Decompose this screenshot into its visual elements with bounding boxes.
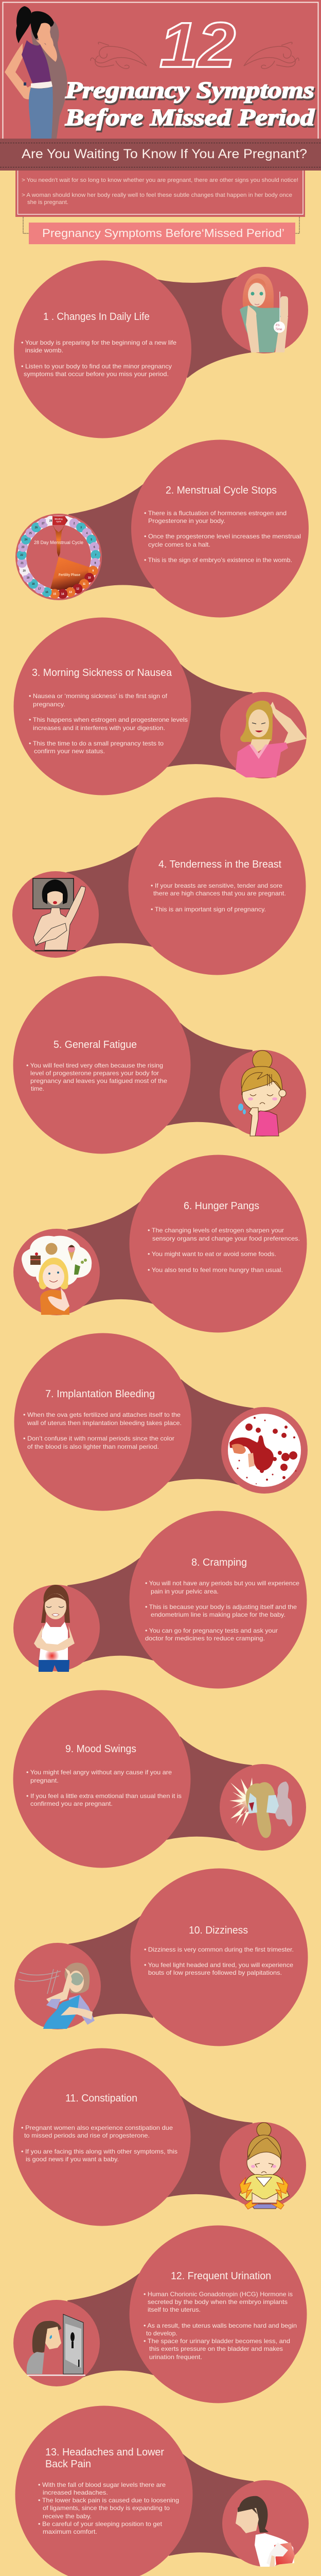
body text	[145, 1580, 299, 1642]
body text: Progesterone in your body.	[148, 518, 225, 524]
body text: • You will not have any periods but you will experience	[145, 1580, 299, 1587]
small circle	[220, 1050, 306, 1137]
chart: 28 day cycle wheel: Bleeding	[55, 518, 63, 520]
ornament right	[244, 42, 299, 69]
section 9: mood swings	[13, 1690, 306, 1868]
body text: inside womb.	[25, 347, 63, 354]
body text: • This the time to do a small pregnancy tests to	[29, 740, 164, 747]
body text: endometrium line is making place for the baby.	[151, 1612, 286, 1618]
body text: • You can go for pregnancy tests and ask your	[145, 1628, 278, 1634]
small circle	[15, 514, 102, 600]
chart: 28 day cycle wheel: 5	[91, 538, 92, 541]
body text: cycle comes to a halt.	[148, 541, 210, 548]
body text: symptoms that occur before you miss your period.	[24, 371, 169, 378]
body text: • This happens when estrogen and progesterone levels	[29, 717, 188, 723]
body text: • You might feel angry without any cause if you are	[26, 1769, 172, 1776]
body text: is good news if you want a baby.	[26, 2156, 119, 2163]
small circle	[220, 1764, 306, 1851]
main circle	[130, 1155, 307, 1332]
question banner: Are You Waiting To Know If You Are Pregnant?	[22, 147, 307, 161]
body text: pain in your pelvic area.	[151, 1588, 219, 1595]
main circle	[13, 976, 190, 1154]
body text: • This is the sign of embryo’s existence in the womb.	[144, 557, 292, 564]
body text: there are high chances that you are pregnant.	[153, 890, 286, 897]
body text: doctor for medicines to reduce cramping.	[145, 1635, 265, 1642]
cheeks	[251, 2165, 276, 2168]
section 6: hunger pangs	[13, 1155, 307, 1332]
icon: woman examining breast	[33, 878, 85, 951]
body text: • You might want to eat or avoid some foods.	[148, 1251, 276, 1258]
body text: • If you are facing this along with other symptoms, this	[21, 2148, 177, 2155]
connector	[168, 1379, 254, 1485]
question banner	[0, 139, 321, 171]
body text: pregnancy.	[33, 701, 65, 708]
body text	[38, 2482, 179, 2535]
body text: • As a result, the uterus walls become hard and begin	[144, 2323, 297, 2329]
connector	[156, 277, 252, 378]
body text: bouts of low pressure followed by palpitations.	[148, 1970, 282, 1976]
chart: 28 day cycle wheel: 10	[88, 577, 91, 580]
heading: 5. General Fatigue	[53, 1039, 137, 1050]
body text: • The lower back pain is caused due to loosening	[38, 2497, 179, 2504]
main circle	[130, 2226, 307, 2403]
body text: confirm your new status.	[34, 748, 105, 755]
chart: 28 day cycle wheel: 13	[69, 591, 72, 594]
main circle	[15, 2406, 192, 2576]
body text	[23, 1412, 182, 1450]
small circle	[14, 1943, 101, 2029]
chart: 28 day cycle wheel: 18	[32, 583, 34, 586]
chart: 28 day cycle wheel: 16	[45, 591, 48, 594]
body text: • If you feel a little extra emotional than usual then it is	[26, 1793, 182, 1800]
section 11: constipation	[13, 2048, 306, 2226]
icon: red-haired woman with pendulum: It's	[276, 324, 279, 327]
chart: 28 day cycle wheel: 28 Day Menstrual Cycle	[34, 540, 83, 546]
main circle	[130, 1511, 307, 1689]
ornament left	[91, 42, 147, 69]
chart: 28 day cycle wheel: 17	[38, 587, 41, 590]
connector	[67, 1556, 153, 1663]
body text	[151, 883, 286, 913]
section 12: frequent urination	[13, 2226, 307, 2403]
fertility wedge	[50, 557, 91, 590]
main circle	[14, 261, 191, 438]
body text	[29, 693, 188, 755]
connector	[67, 2272, 153, 2378]
main circle	[129, 798, 306, 975]
body text	[144, 510, 301, 564]
chart: 28 day cycle wheel: 11	[83, 583, 85, 586]
small circle	[221, 1407, 308, 1494]
body text: • Don’t confuse it with normal periods since the color	[23, 1435, 174, 1442]
body text: • Your body is preparing for the beginning of a new life	[21, 340, 176, 346]
body text: of the blood is also lighter than normal period.	[27, 1444, 159, 1450]
small circle	[13, 2300, 100, 2386]
body text: • Nausea or ‘morning sickness’ is the first sign of	[29, 693, 168, 700]
intro text	[22, 177, 298, 206]
body text	[148, 1227, 300, 1274]
body text	[26, 1062, 167, 1092]
chart: 28 day cycle wheel: 1	[66, 519, 67, 522]
chart: 28 day cycle wheel: 26	[35, 527, 38, 530]
body text: • You feel light headed and tired, you will experience	[144, 1962, 293, 1969]
section 13: headaches and lower back pain	[15, 2406, 309, 2576]
icon: tired girl	[241, 1050, 286, 1136]
body text: • Pregnant women also experience constipation due	[21, 2125, 173, 2131]
small circle	[222, 2480, 309, 2567]
body text: • You will feel tired very often because the rising	[26, 1062, 163, 1069]
body text: • Listen to your body to find out the minor pregnancy	[21, 363, 172, 370]
body text: secreted by the body when the embryo implants	[148, 2299, 288, 2306]
main circle	[131, 1868, 308, 2046]
title number 12: 12	[159, 10, 236, 81]
chart: 28 day cycle wheel: 28	[49, 519, 52, 522]
icon: girl holding stomach	[239, 2123, 289, 2209]
chart: 28 day cycle wheel: 23	[22, 546, 25, 549]
icon: woman at restroom door	[27, 2314, 85, 2376]
main circle	[14, 1333, 191, 1511]
sub-heading bracket	[23, 217, 299, 233]
body text: itself to the uterus.	[148, 2307, 201, 2313]
sub-heading box	[29, 223, 295, 244]
chart: 28 day cycle wheel: 20	[23, 570, 26, 573]
heading: 2. Menstrual Cycle Stops	[166, 485, 277, 496]
chart: 28 day cycle wheel: 12	[76, 587, 79, 590]
title text: Pregnancy Symptoms	[65, 77, 314, 103]
connector	[67, 1200, 153, 1307]
heading: 7. Implantation Bleeding	[45, 1388, 155, 1400]
connector	[167, 1736, 252, 1843]
section 4: tenderness in the breast	[12, 798, 306, 975]
icon: woman with headache	[236, 701, 307, 777]
body text: • With the fall of blood sugar levels there are	[38, 2482, 166, 2488]
chart: 28 day cycle wheel: 8	[95, 562, 96, 565]
heading: 10. Dizziness	[189, 1925, 248, 1936]
heading: 3. Morning Sickness or Nausea	[32, 667, 172, 679]
intro panel	[15, 170, 305, 217]
small circle	[222, 267, 308, 353]
chart: 28 day cycle wheel: 25	[29, 532, 32, 535]
small circle	[13, 1585, 100, 1671]
icon: pain bolts	[240, 2177, 288, 2209]
chart: 28 day cycle wheel: 7	[95, 554, 97, 557]
icon: dizzy woman	[19, 1963, 95, 2029]
main circle	[13, 2048, 190, 2226]
intro text: she is pregnant.	[27, 199, 68, 206]
heading: 4. Tenderness in the Breast	[158, 859, 281, 870]
heading: 12. Frequent Urination	[171, 2270, 271, 2282]
title text: Before Missed Period	[65, 104, 315, 130]
icon: red-haired woman with pendulum	[240, 274, 288, 352]
body text: • When the ova gets fertilized and attaches itself to the	[23, 1412, 181, 1418]
section 8: cramping	[13, 1511, 307, 1689]
body text: increases and it interferes with your digestion.	[33, 725, 165, 732]
body text: • This is an important sign of pregnancy.	[151, 906, 266, 913]
body text: receive the baby.	[43, 2513, 92, 2520]
chart: 28 day cycle wheel: 14	[61, 592, 64, 596]
small circle	[220, 2122, 306, 2209]
section 5: general fatigue	[13, 976, 306, 1154]
heading: 13. Headaches and Lower	[45, 2447, 164, 2458]
icon: two-faced mood illustration	[229, 1777, 292, 1838]
heading: 11. Constipation	[65, 2093, 137, 2104]
body text	[21, 340, 176, 378]
section 7: implantation bleeding	[14, 1333, 308, 1511]
body text: • Once the progesterone level increases the menstrual	[144, 533, 301, 540]
chart: 28 day cycle wheel: 15	[53, 592, 56, 596]
header panel	[0, 0, 321, 151]
main circle	[13, 1690, 190, 1868]
chart: 28 day cycle wheel: 9	[93, 570, 94, 573]
chart: 28 day cycle wheel: 22	[20, 554, 23, 557]
chart: 28 day cycle wheel: Fertility Phase	[59, 572, 80, 577]
title line shadow: Before Missed Period	[66, 106, 316, 132]
body text	[144, 2291, 297, 2361]
body text	[21, 2125, 177, 2163]
body text: maximum comfort.	[43, 2529, 97, 2535]
body text: • If your breasts are sensitive, tender and sore	[151, 883, 282, 889]
heading: 6. Hunger Pangs	[184, 1200, 259, 1212]
small circle	[220, 692, 307, 778]
chart: 28 day cycle wheel	[17, 516, 100, 599]
body text	[26, 1769, 182, 1807]
chart: 28 day cycle wheel: 2	[74, 522, 75, 526]
body text: of ligaments, since the body is expanding to	[43, 2505, 170, 2512]
body text: confirmed you are pregnant.	[30, 1801, 113, 1807]
chart: 28 day cycle wheel: Cycle	[56, 520, 61, 522]
sub-heading box: Pregnancy Symptoms Before‘Missed Period’	[42, 227, 284, 240]
body text: time.	[31, 1086, 44, 1092]
body text: urination frequent.	[149, 2354, 202, 2361]
chart: 28 day cycle wheel: 24	[25, 538, 27, 541]
body text: pregnant.	[30, 1777, 59, 1784]
body text: • Dizziness is very common during the first trimester.	[144, 1946, 294, 1953]
body text: level of progesterone prepares your body for	[30, 1070, 159, 1077]
title line shadow: Pregnancy Symptoms	[66, 78, 315, 105]
small circle	[13, 1229, 100, 1315]
intro text: > A woman should know her body really well to feel these subtle changes that happen in her body once	[22, 192, 292, 198]
chart: 28 day cycle wheel: 19	[27, 577, 29, 580]
icon: woman with back pain	[236, 2496, 295, 2567]
heading: 8. Cramping	[191, 1557, 247, 1568]
title text	[65, 77, 315, 130]
chart: 28 day cycle wheel: 21	[21, 562, 24, 565]
intro text: > You needn't wait for so long to know whether you are pregnant, there are other signs you should notice!	[22, 177, 298, 183]
icon: tear drops	[238, 1097, 277, 1114]
body text	[144, 1946, 294, 1976]
section 10: dizziness	[14, 1868, 308, 2046]
title line shadow	[66, 78, 316, 132]
section 1: changes in daily life	[14, 261, 308, 438]
body text: sensory organs and change your food preferences.	[152, 1235, 300, 1242]
main circle	[13, 617, 191, 795]
body text: pregnancy and leaves you fatigued most of the	[30, 1078, 167, 1084]
heading: 1 . Changes In Daily Life	[43, 311, 150, 323]
body text: • This is because your body is adjusting itself and the	[145, 1604, 297, 1611]
chart: 28 day cycle wheel: 27	[42, 522, 45, 526]
chart: 28 day cycle wheel: 3	[80, 527, 82, 530]
section 3: morning sickness	[13, 617, 307, 795]
body text: • Human Chorionic Gonadotropin (HCG) Hormone is	[144, 2291, 293, 2298]
body text: • Be careful of your sleeping position to get	[38, 2521, 163, 2528]
body text: to missed periods and rise of progesterone.	[24, 2132, 150, 2139]
icon: woman thinking of food	[22, 1236, 92, 1315]
icon: blood splatter	[228, 1414, 301, 1487]
connector	[169, 2452, 254, 2559]
section 2: menstrual cycle stops	[15, 440, 309, 617]
connector	[66, 842, 153, 951]
body text: wall of uterus then implantation bleeding takes place.	[27, 1420, 182, 1427]
body text: • The space for urinary bladder becomes less, and	[144, 2338, 290, 2345]
chart: 28 day cycle wheel: 6	[94, 546, 95, 549]
connector	[167, 2094, 253, 2201]
main circle	[131, 440, 309, 617]
body text: • You also tend to feel more hungry than usual.	[148, 1267, 283, 1274]
connector	[167, 1023, 253, 1129]
connector	[68, 484, 154, 592]
small circle	[12, 871, 99, 958]
icon: woman with cramps	[34, 1585, 75, 1672]
body text: • The changing levels of estrogen sharpen your	[148, 1227, 284, 1234]
body text: this exerts pressure on the bladder and makes	[149, 2346, 283, 2352]
icon: red-haired woman with pendulum: Time	[275, 328, 282, 331]
body text: to develop.	[146, 2330, 177, 2337]
heading: 9. Mood Swings	[65, 1743, 136, 1755]
connector	[167, 664, 253, 771]
heading second line: Back Pain	[45, 2459, 91, 2470]
connector	[68, 1914, 153, 2021]
chart: 28 day cycle wheel: 4	[86, 532, 88, 535]
body text: • There is a fluctuation of hormones estrogen and	[144, 510, 287, 517]
body text: increased headaches.	[43, 2489, 108, 2496]
icon: woman with pregnant shadow	[5, 6, 67, 139]
